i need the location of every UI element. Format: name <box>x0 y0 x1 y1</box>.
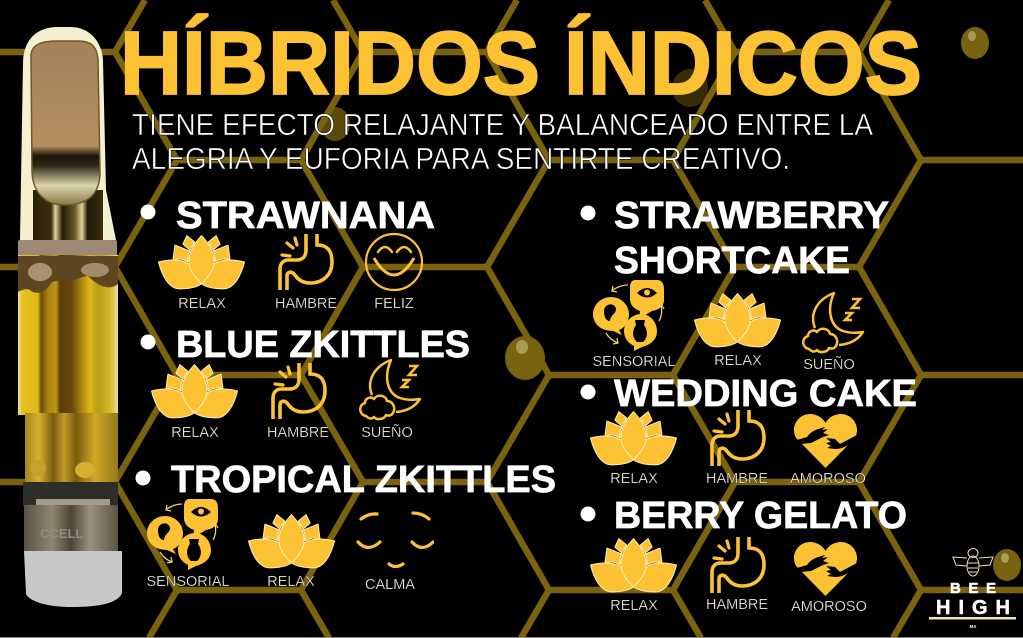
panel: strawberry shortcake: STRAWBERRY <box>614 195 889 237</box>
panel: strawberry shortcake: SUEÑO <box>803 356 855 373</box>
panel: wedding cake: WEDDING CAKE <box>614 373 917 415</box>
panel: berry gelato: HAMBRE <box>706 597 768 613</box>
panel: tropical zkittles <box>136 459 556 593</box>
panel: blue zkittles <box>140 324 470 441</box>
panel: strawnana: FELIZ <box>374 296 414 312</box>
engraved brand: CCELL <box>40 526 83 541</box>
panel: strawberry shortcake: SENSORIAL <box>592 354 676 370</box>
honey drops <box>320 27 1021 581</box>
panel: blue zkittles: BLUE ZKITTLES <box>176 324 470 366</box>
cartridge photo <box>18 27 122 607</box>
bottom edge <box>0 637 1023 638</box>
panel: strawberry shortcake: RELAX <box>714 353 762 369</box>
logo: bee high: HIGH <box>936 597 1010 619</box>
logo: bee high <box>929 548 1016 629</box>
title: HÍBRIDOS ÍNDICOS <box>120 13 922 114</box>
clear collar <box>18 240 117 256</box>
panel: blue zkittles: HAMBRE <box>267 425 329 441</box>
frosted base <box>24 551 122 607</box>
panel: wedding cake <box>580 373 917 487</box>
subtitle: ALEGRIA Y EUFORIA PARA SENTIRTE CREATIVO. <box>132 141 790 176</box>
panel: tropical zkittles: SENSORIAL <box>146 574 230 590</box>
panel: blue zkittles: SUEÑO <box>361 424 413 441</box>
panel: blue zkittles: RELAX <box>171 425 219 441</box>
panel: tropical zkittles: CALMA <box>365 577 415 593</box>
panel: berry gelato <box>580 495 907 615</box>
panel: strawnana: RELAX <box>178 296 226 312</box>
metal ring <box>25 413 118 482</box>
subtitle: TIENE EFECTO RELAJANTE Y BALANCEADO ENTRE LA <box>132 107 873 142</box>
logo: bee high: BEE <box>950 580 996 597</box>
cartridge tip <box>20 27 116 240</box>
oil tank <box>18 255 118 415</box>
panel: strawnana: HAMBRE <box>275 296 337 312</box>
panel: berry gelato: RELAX <box>610 598 658 614</box>
subtitle <box>132 107 873 176</box>
panel: tropical zkittles: RELAX <box>267 574 315 590</box>
panel: wedding cake: RELAX <box>610 471 658 487</box>
panel: berry gelato: BERRY GELATO <box>614 495 907 537</box>
icon: bee <box>953 548 993 576</box>
steel band <box>24 505 118 552</box>
panel: strawnana: STRAWNANA <box>176 195 435 237</box>
panel: tropical zkittles: TROPICAL ZKITTLES <box>171 459 556 501</box>
panel: wedding cake: HAMBRE <box>706 471 768 487</box>
clear section <box>23 482 118 506</box>
logo: bee high: MX <box>970 624 976 629</box>
panel: strawnana <box>140 195 435 312</box>
panel: strawberry shortcake <box>580 195 889 373</box>
panel: strawberry shortcake: SHORTCAKE <box>614 240 850 282</box>
panel: berry gelato: AMOROSO <box>791 599 867 615</box>
panel: wedding cake: AMOROSO <box>790 471 866 487</box>
